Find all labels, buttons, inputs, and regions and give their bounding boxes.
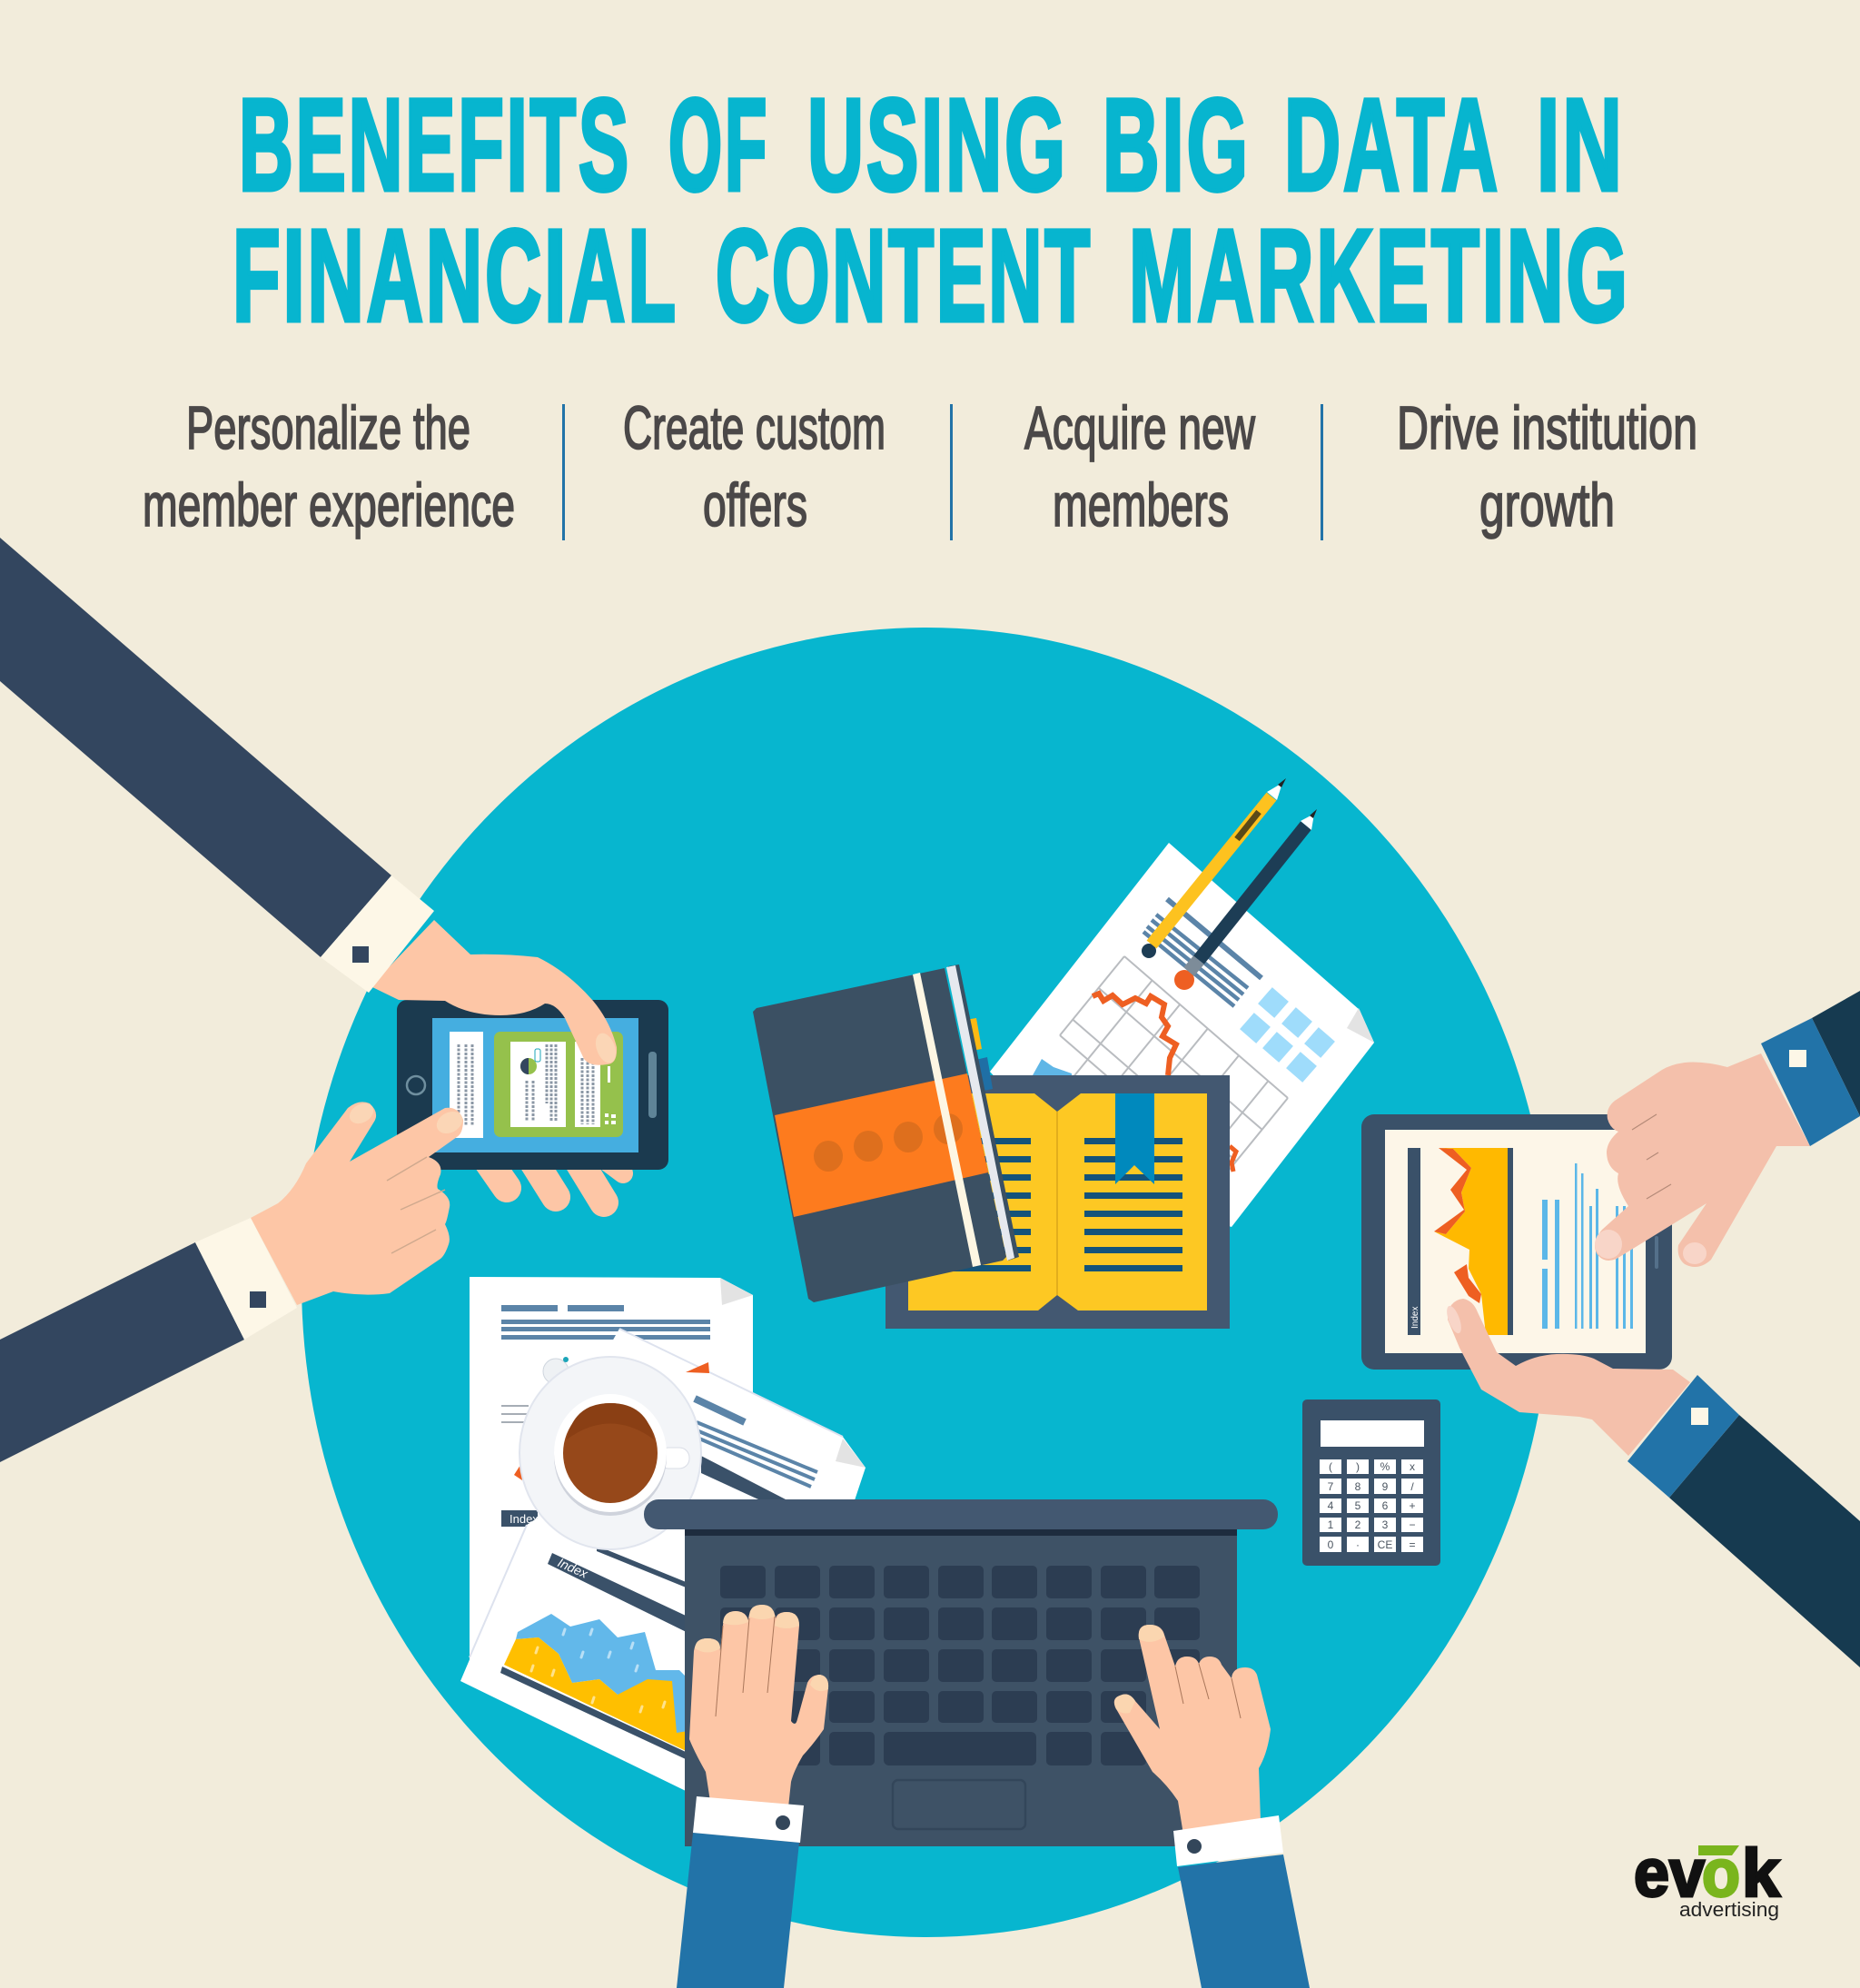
arm: lower right holding tablet xyxy=(1444,1299,1860,1667)
calculator: = xyxy=(1409,1538,1416,1551)
tablet area chart xyxy=(1434,1148,1513,1335)
logo: evok advertising: o xyxy=(1702,1835,1740,1911)
calculator: + xyxy=(1409,1499,1416,1512)
fingers beneath phone xyxy=(486,1158,623,1202)
calculator: 8 xyxy=(1355,1480,1361,1493)
grid paper xyxy=(990,843,1374,1248)
calculator: 9 xyxy=(1382,1480,1389,1493)
calculator: ) xyxy=(1356,1460,1360,1473)
benefit: personalize: member experience xyxy=(143,471,515,539)
benefit: acquire members xyxy=(1024,394,1255,539)
chart page xyxy=(460,1489,699,1798)
benefit: custom offers: Create custom xyxy=(623,394,885,462)
keyboard xyxy=(720,1566,1200,1765)
open book xyxy=(885,1075,1230,1329)
tablet: Index xyxy=(1410,1307,1420,1329)
left document stack xyxy=(460,1277,866,1798)
icon: yellow pencil xyxy=(1142,778,1286,958)
calculator: 6 xyxy=(1382,1499,1389,1512)
calculator: 2 xyxy=(1355,1518,1361,1531)
arm: typing right hand xyxy=(1114,1625,1310,1988)
title: BIG xyxy=(1103,72,1251,218)
benefits row xyxy=(143,394,1697,540)
calculator: % xyxy=(1380,1460,1390,1473)
tablet xyxy=(1361,1114,1672,1370)
benefit: custom offers: offers xyxy=(703,471,807,539)
benefit: acquire members: members xyxy=(1053,471,1229,539)
title: DATA xyxy=(1284,72,1500,218)
logo: evok advertising xyxy=(1634,1835,1781,1921)
title: USING xyxy=(807,72,1068,218)
benefit: drive growth xyxy=(1397,394,1697,539)
benefit: drive growth: growth xyxy=(1479,471,1615,539)
calculator: · xyxy=(1356,1538,1360,1551)
arm: top right pointing at tablet xyxy=(1595,991,1860,1267)
title xyxy=(232,72,1630,349)
title: IN xyxy=(1537,72,1625,218)
title: CONTENT xyxy=(716,203,1093,349)
calculator: 1 xyxy=(1328,1518,1334,1531)
calculator: / xyxy=(1410,1480,1414,1493)
calculator: 5 xyxy=(1355,1499,1361,1512)
smartphone xyxy=(397,1000,668,1170)
benefit: drive growth: Drive institution xyxy=(1397,394,1697,462)
benefit: personalize xyxy=(143,394,515,539)
benefit: personalize: Personalize the xyxy=(186,394,470,462)
tablet bars xyxy=(1542,1163,1633,1329)
laptop xyxy=(644,1499,1278,1846)
document page: Index xyxy=(510,1512,539,1526)
calculator xyxy=(1302,1400,1440,1566)
calculator: x xyxy=(1410,1460,1415,1473)
calculator: 4 xyxy=(1328,1499,1334,1512)
teal circle table xyxy=(302,628,1551,1937)
benefit: custom offers xyxy=(623,394,885,539)
title: OF xyxy=(668,72,769,218)
document page xyxy=(470,1277,753,1662)
calculator: 7 xyxy=(1328,1480,1334,1493)
calculator: 3 xyxy=(1382,1518,1389,1531)
title: BENEFITS xyxy=(239,72,631,218)
chart page: Index xyxy=(556,1555,590,1581)
calculator: CE xyxy=(1378,1538,1392,1551)
coffee cup xyxy=(519,1357,701,1549)
notebook xyxy=(753,964,1019,1302)
calculator: − xyxy=(1409,1518,1416,1531)
arm: top left holding phone xyxy=(0,538,619,1065)
tilted page xyxy=(604,1329,866,1503)
calculator: 0 xyxy=(1328,1538,1334,1551)
logo: evok advertising: k xyxy=(1742,1835,1781,1911)
benefit: acquire members: Acquire new xyxy=(1024,394,1255,462)
calculator: ( xyxy=(1329,1460,1332,1473)
logo: evok advertising: advertising xyxy=(1679,1898,1779,1921)
title: FINANCIAL xyxy=(232,203,678,349)
arm: typing left hand xyxy=(677,1605,828,1988)
icon: dark pencil xyxy=(1174,809,1317,990)
arm: left pointing at phone xyxy=(0,1099,466,1462)
logo: evok advertising: ev xyxy=(1634,1835,1705,1911)
